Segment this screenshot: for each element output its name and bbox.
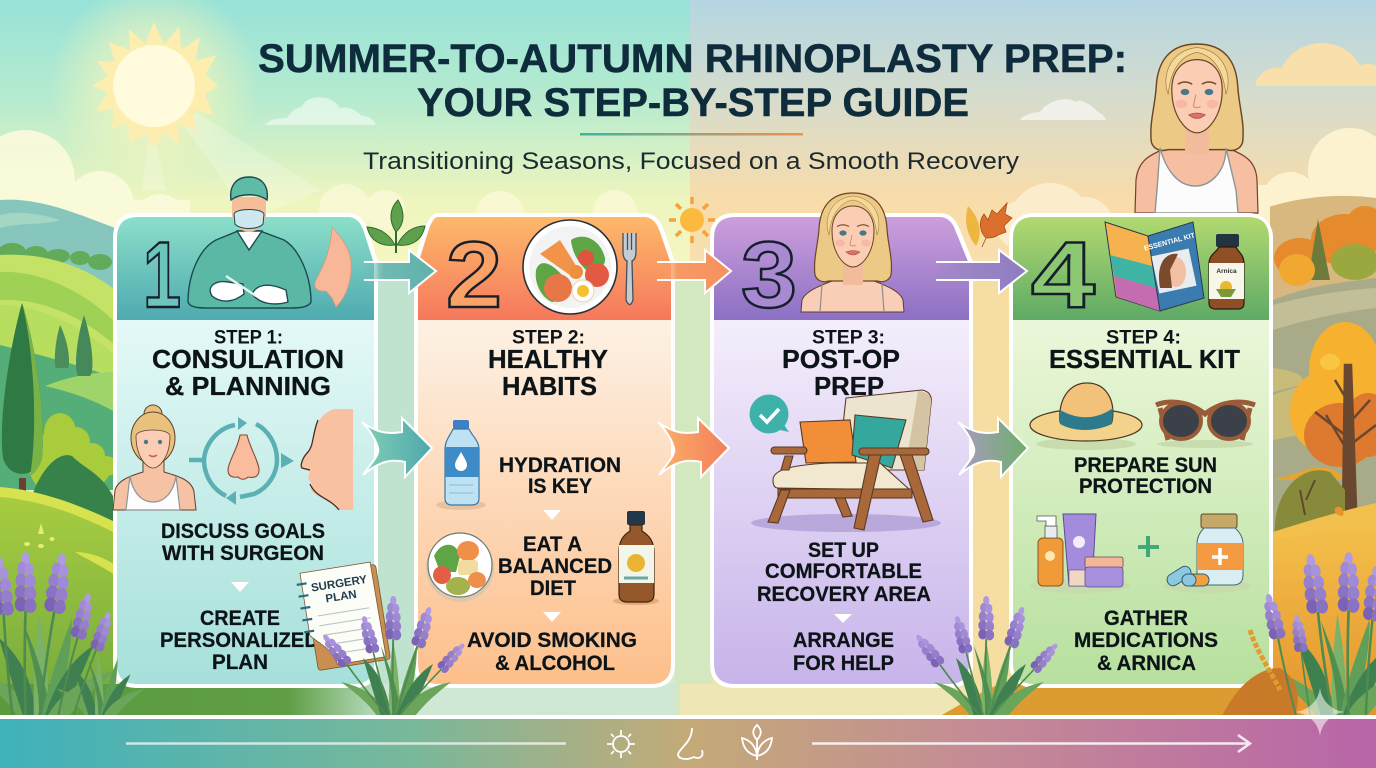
illustration: patient and nose cycle xyxy=(113,405,353,510)
step 4 text: MEDICATIONS xyxy=(1074,629,1218,652)
number 1: 1 xyxy=(143,222,181,327)
progress line left xyxy=(126,742,566,745)
step 1 text: PLAN xyxy=(212,651,268,674)
icon: medication jar and pills xyxy=(1163,514,1251,593)
icon: surgery plan notebook xyxy=(295,561,390,672)
icon: surgeon xyxy=(188,177,311,308)
step 4 header xyxy=(1013,217,1269,320)
step 3 text xyxy=(757,539,931,675)
icon: check bubble xyxy=(750,394,789,434)
step 1 text: DISCUSS GOALS xyxy=(161,520,325,543)
panel: step 1 xyxy=(113,177,390,688)
woman portrait: step 3 xyxy=(801,193,904,312)
icon: water bottle xyxy=(436,420,486,510)
title xyxy=(258,37,1127,125)
icon: brochure xyxy=(1105,222,1204,311)
step 2 text: IS KEY xyxy=(528,475,592,498)
icon: plus xyxy=(1138,536,1159,557)
step 1 label: STEP 1: xyxy=(214,326,283,348)
step 3 text: ARRANGE xyxy=(793,629,894,652)
icon: sun hat xyxy=(1030,383,1142,450)
step 3 label: PREP xyxy=(814,371,884,401)
icon: arnica bottle: Arnica xyxy=(1216,268,1237,275)
icon: brochure: ESSENTIAL KIT xyxy=(1143,232,1197,253)
step 1 header xyxy=(117,217,374,320)
step 4 label xyxy=(1049,326,1240,374)
number 4: 4 xyxy=(1031,222,1095,327)
step 2 text: AVOID SMOKING xyxy=(467,629,637,652)
icon: large sun xyxy=(49,0,320,220)
step 2 header xyxy=(418,217,671,320)
step 2 text: & ALCOHOL xyxy=(495,652,615,675)
step 4 text: PROTECTION xyxy=(1079,475,1212,498)
woman portrait: top right xyxy=(1135,44,1258,213)
step 4 text: PREPARE SUN xyxy=(1074,454,1217,477)
step 2 text xyxy=(467,454,637,675)
icon: skincare set xyxy=(1030,514,1130,593)
step 3 label xyxy=(782,326,900,401)
step 3 header xyxy=(714,217,969,320)
step 2 label: STEP 2: xyxy=(512,326,585,348)
icon: footer sun xyxy=(607,730,635,758)
step 2 text: EAT A xyxy=(523,533,582,556)
step 2 text: DIET xyxy=(530,577,576,600)
icon: footer leaves xyxy=(742,725,772,760)
step 3 text: SET UP xyxy=(808,539,879,562)
step 1 label: CONSULATION xyxy=(152,344,344,374)
step 1 text: WITH SURGEON xyxy=(162,542,324,565)
hills: summer left xyxy=(0,200,118,720)
step 2 text: HYDRATION xyxy=(499,454,621,477)
hills: autumn right xyxy=(1270,196,1376,715)
icon: surgery plan notebook: SURGERY xyxy=(310,574,368,595)
lavender plant: left edge xyxy=(0,552,145,718)
arrow: step 3 to 4 top xyxy=(934,250,1027,293)
icon: arnica bottle xyxy=(1209,234,1244,309)
lavender plant: between steps 1 and 2 xyxy=(319,596,469,721)
arrow: step 1 to 2 top xyxy=(362,250,436,293)
number 2: 2 xyxy=(446,222,502,327)
step 4 text xyxy=(1074,454,1218,675)
step 1 label xyxy=(152,326,344,401)
step 3 text: COMFORTABLE xyxy=(765,560,922,583)
icon: autumn leaf xyxy=(966,203,1012,247)
panel: step 3 xyxy=(710,193,973,688)
lavender plant: between steps 3 and 4 xyxy=(912,596,1062,721)
step 2 text: BALANCED xyxy=(498,555,612,578)
step 3 text: RECOVERY AREA xyxy=(757,583,931,606)
icon: sunglasses xyxy=(1156,402,1255,448)
icon: recovery chair xyxy=(751,390,941,532)
arrow: step 2 to 3 lower xyxy=(658,418,729,477)
icon: surgery plan notebook: PLAN xyxy=(325,589,358,605)
icon: footer nose xyxy=(678,728,703,759)
step 1 text: PERSONALIZED xyxy=(160,629,319,652)
number 3: 3 xyxy=(741,222,797,327)
icon: sparkle watermark xyxy=(1296,688,1344,736)
step 2 label xyxy=(488,326,608,401)
icon: salad plate xyxy=(523,220,617,314)
icon: sprout xyxy=(367,200,425,253)
step 4 label: STEP 4: xyxy=(1106,326,1181,348)
footer bar xyxy=(0,715,1376,768)
arrow: step 1 to 2 lower xyxy=(362,418,432,477)
icon: nose xyxy=(315,227,351,307)
panel: step 2 xyxy=(414,213,675,688)
panel: step 4 xyxy=(1009,213,1273,688)
step 4 label: ESSENTIAL KIT xyxy=(1049,344,1240,374)
icon: balanced diet plate xyxy=(426,533,494,602)
step 2 label: HABITS xyxy=(502,371,597,401)
icon: fork xyxy=(623,233,636,304)
step 1 text xyxy=(160,520,325,674)
title: YOUR STEP-BY-STEP GUIDE xyxy=(417,81,969,125)
title: SUMMER-TO-AUTUMN RHINOPLASTY PREP: xyxy=(258,37,1127,81)
clouds xyxy=(0,43,1376,267)
icon: amber bottle xyxy=(613,511,659,605)
step 4 text: & ARNICA xyxy=(1097,652,1196,675)
step 3 label: STEP 3: xyxy=(812,326,885,348)
step 4 text: GATHER xyxy=(1104,607,1188,630)
subtitle: Transitioning Seasons, Focused on a Smooth Recovery xyxy=(363,148,1019,175)
lavender plant: right edge xyxy=(1222,552,1376,718)
ground strips behind cards xyxy=(0,262,1290,716)
arrow: step 3 to 4 lower xyxy=(958,418,1028,477)
arrow: step 2 to 3 top xyxy=(655,250,731,293)
step 3 text: FOR HELP xyxy=(793,652,894,675)
step 1 label: & PLANNING xyxy=(165,371,331,401)
step 3 label: POST-OP xyxy=(782,344,900,374)
progress arrow right xyxy=(812,735,1250,752)
step 2 label: HEALTHY xyxy=(488,344,608,374)
step 1 text: CREATE xyxy=(200,607,280,630)
icon: small sun xyxy=(669,197,715,243)
